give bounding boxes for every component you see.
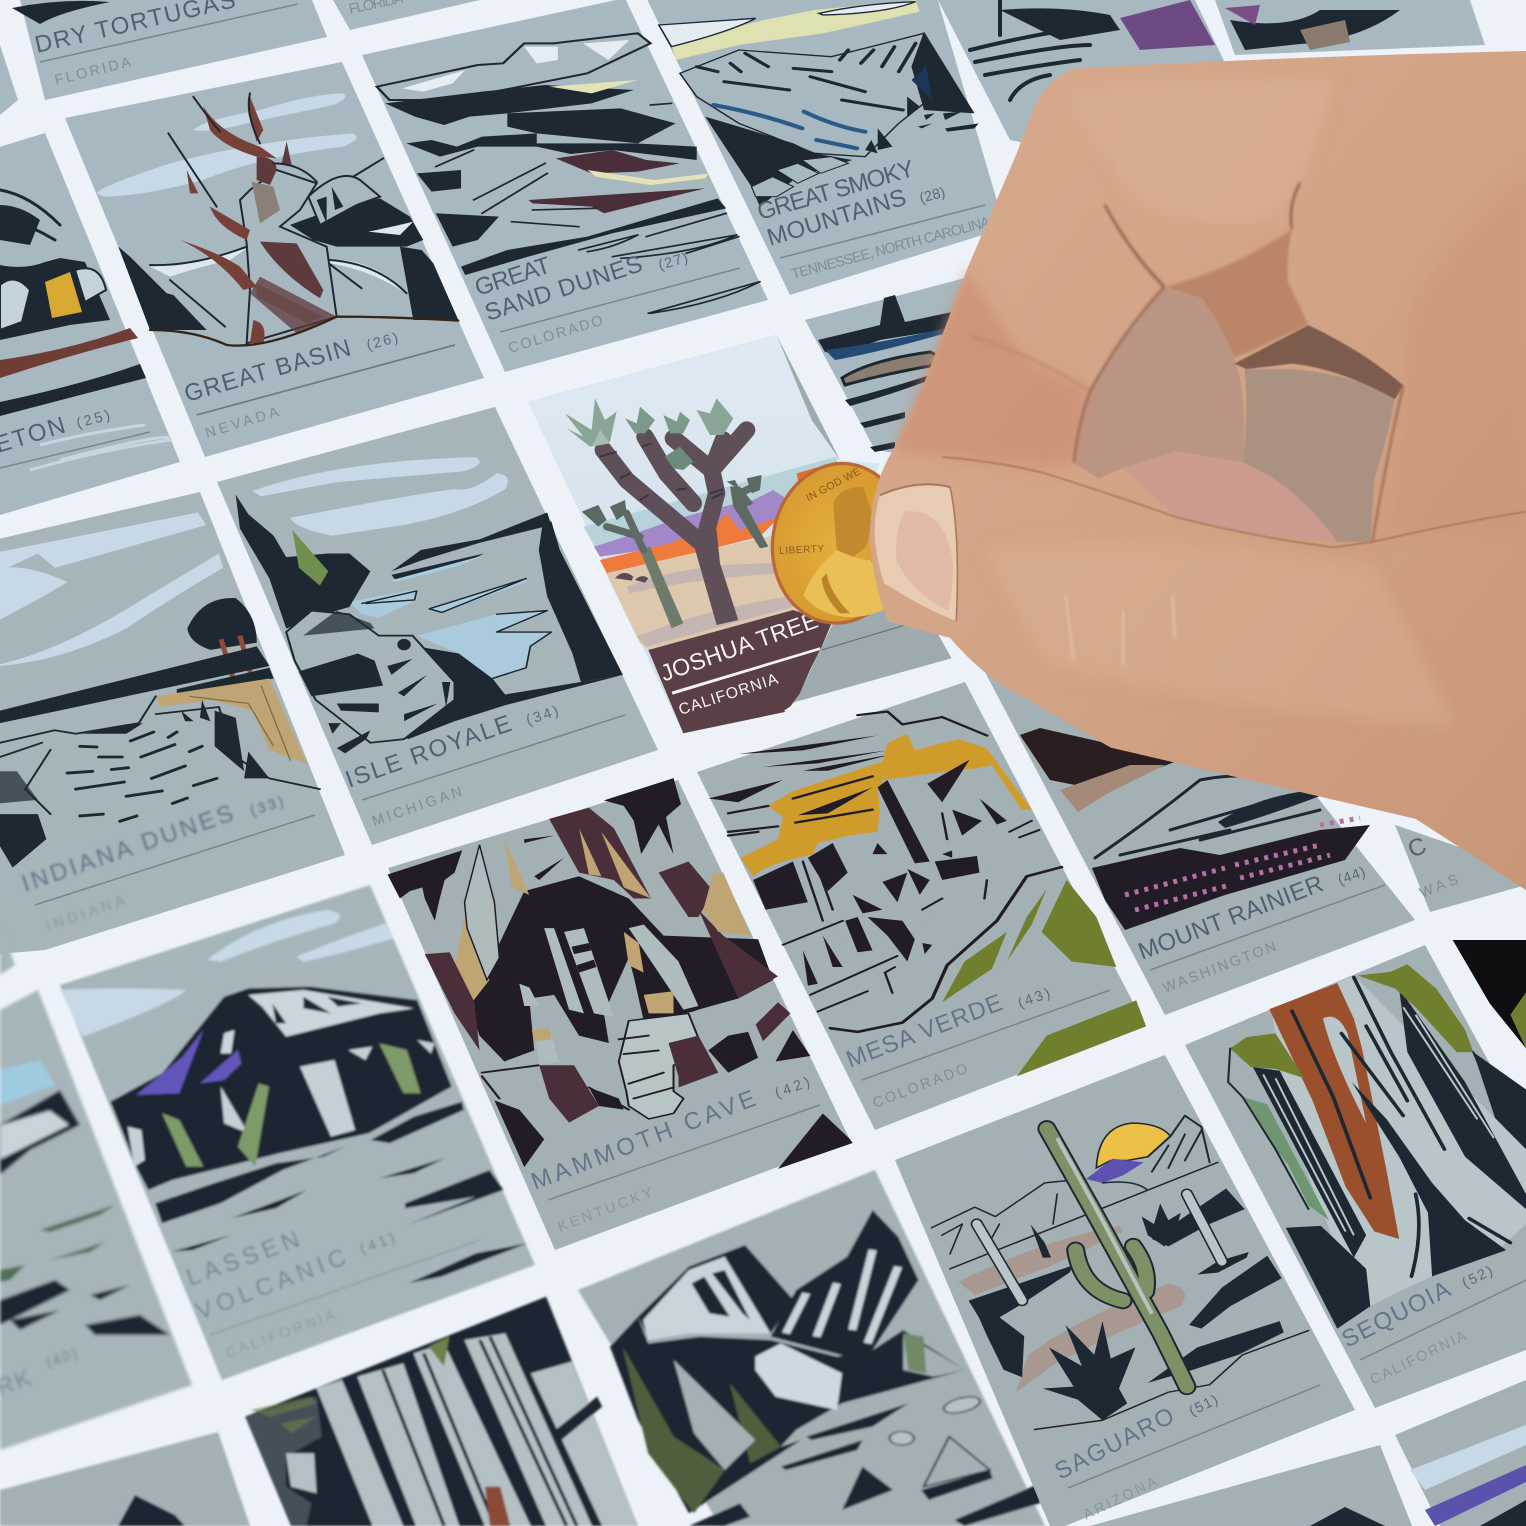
card: Dry Tortugas — [12, 0, 327, 100]
card: Joshua Tree, scratched — [528, 335, 952, 733]
card: Great Basin: (26) — [365, 330, 400, 354]
card: Lassen Volcanic: VOLCANIC — [192, 1244, 350, 1326]
card: Great Basin: NEVADA — [203, 404, 281, 442]
hand: shading and creases — [892, 270, 1090, 468]
card: Joshua Tree, scratched: CALIFORNIA — [677, 671, 781, 719]
card: Mesa Verde: COLORADO — [871, 1061, 970, 1112]
card: next to Joshua Tree — [805, 278, 1070, 480]
card: Indiana Dunes: (33) — [248, 794, 286, 820]
card: bottom right partial cards — [1090, 1380, 1526, 1526]
heading: Mammoth Cave: MAMMOTH CAVE — [527, 1085, 759, 1196]
card: Isle Royale — [217, 407, 658, 845]
card: Saguaro: (51) — [1187, 1392, 1221, 1420]
heading: Isle Royale: ISLE ROYALE — [342, 710, 515, 794]
card: Mammoth Cave: (42) — [773, 1074, 812, 1102]
card: North Cascades partial — [1395, 825, 1526, 912]
card: Mammoth Cave: KENTUCKY — [556, 1185, 655, 1236]
heading: Sequoia: SEQUOIA — [1337, 1276, 1455, 1353]
card: North Cascades partial: WAS — [1418, 872, 1461, 902]
hand — [870, 51, 1526, 890]
heading: Mesa Verde: MESA VERDE — [842, 989, 1006, 1074]
card: Joshua Tree, scratched: JOSHUA TREE — [657, 607, 821, 686]
card: top partial cards — [0, 0, 1485, 115]
card: Dry Tortugas: FLORIDA — [53, 54, 133, 89]
card: Indiana Dunes: INDIANA — [44, 893, 127, 935]
card: Mesa Verde: (43) — [1016, 985, 1052, 1012]
card: Rocky Mountain — [578, 1170, 1045, 1526]
hand: thumbnail — [875, 484, 957, 621]
card: Great Sand Dunes: SAND DUNES — [482, 250, 646, 327]
card: Great Smoky Mountains — [645, 0, 1005, 295]
heading: Great Sand Dunes: GREAT — [472, 252, 554, 302]
card: Sequoia — [1185, 940, 1526, 1408]
hand: knuckle pad shadow — [1164, 229, 1308, 358]
card: Great Smoky Mountains: (28) — [918, 185, 947, 207]
card: Great Sand Dunes: (27) — [657, 250, 690, 274]
coin: penny: LIBERTY — [779, 544, 825, 557]
card: Mount Rainier: WASHINGTON — [1161, 939, 1278, 997]
coin: penny — [762, 455, 916, 632]
card: Grand Teton: (25) — [75, 408, 112, 432]
card: Lassen Volcanic: (41) — [358, 1230, 397, 1258]
card: left column partial: (40) — [44, 1346, 79, 1372]
coin: penny: IN GOD WE — [804, 466, 863, 504]
card: Great Sand Dunes: COLORADO — [506, 313, 605, 357]
heading: Lassen Volcanic: LASSEN — [183, 1226, 303, 1292]
card: Redwood — [245, 1297, 638, 1526]
card: Great Smoky Mountains: MOUNTAINS — [764, 184, 909, 252]
card: Mammoth Cave — [387, 778, 853, 1250]
card: Sequoia: (52) — [1460, 1263, 1496, 1292]
card: Great Sand Dunes — [362, 0, 768, 372]
card: Great Smoky Mountains: TENNESSEE, NORTH CAROLINA — [790, 214, 992, 283]
card: Sequoia: CALIFORNIA — [1368, 1328, 1469, 1389]
card: Mount Rainier: (44) — [1336, 864, 1368, 889]
card: Indiana Dunes — [0, 492, 345, 960]
card: Great Basin — [65, 62, 484, 457]
hand: main silhouette — [870, 51, 1526, 890]
card: North Cascades partial: C — [1404, 832, 1430, 864]
card: Mesa Verde — [697, 682, 1146, 1130]
card: bottom left partial — [0, 1432, 250, 1526]
card: Grand Teton — [0, 133, 180, 515]
heading: Great Smoky Mountains: GREAT SMOKY — [754, 155, 917, 226]
card: Mount Rainier — [985, 672, 1415, 1015]
heading: Mount Rainier: MOUNT RAINIER — [1134, 870, 1327, 966]
heading: Saguaro: SAGUARO — [1050, 1402, 1179, 1485]
card: Saguaro — [895, 1055, 1355, 1526]
card: Lassen Volcanic — [60, 885, 535, 1380]
heading: Indiana Dunes: INDIANA DUNES — [18, 800, 237, 898]
card: next to Great Smoky — [938, 0, 1290, 200]
card: Saguaro: ARIZONA — [1081, 1474, 1160, 1524]
card: Lassen Volcanic: CALIFORNIA — [224, 1307, 338, 1362]
card: Isle Royale: MICHIGAN — [370, 784, 464, 830]
heading: Great Basin: GREAT BASIN — [181, 334, 354, 408]
card: Isle Royale: (34) — [524, 703, 561, 729]
hand: inner fingers — [1074, 287, 1403, 542]
card: left column partial — [0, 925, 192, 1450]
